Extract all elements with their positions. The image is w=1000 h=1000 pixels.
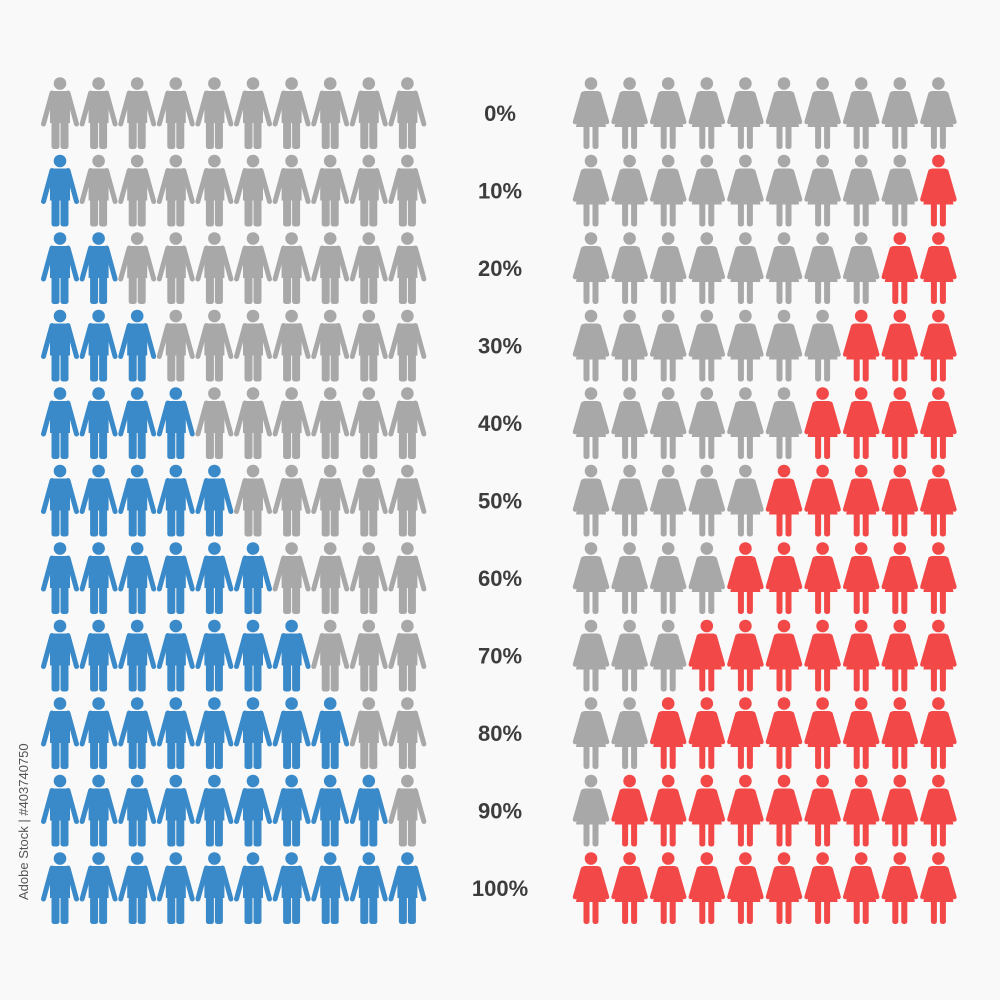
row 40% men (44, 387, 424, 459)
row 50% women (575, 465, 954, 536)
percentage labels: 30% (478, 334, 522, 358)
row 10% men (44, 155, 424, 226)
row 0% men (44, 77, 424, 149)
row 80% men (44, 697, 424, 769)
percentage labels: 50% (478, 488, 522, 514)
row 30% women (575, 310, 954, 382)
percentage labels: 70% (478, 644, 522, 668)
row 90% women (575, 775, 954, 846)
row 80% women (575, 697, 954, 769)
row 60% men (44, 542, 424, 614)
row 50% men (44, 465, 424, 536)
percentage labels: 80% (478, 721, 522, 746)
stock id text: Adobe Stock | #403740750 (16, 743, 31, 900)
percentage labels: 100% (472, 876, 528, 901)
row 30% men (44, 310, 424, 382)
row 70% men (44, 620, 424, 692)
row 70% women (575, 620, 954, 692)
percentage labels: 10% (478, 178, 522, 204)
panel: men grid (44, 77, 424, 924)
row 10% women (575, 155, 954, 226)
panel: women grid (575, 77, 954, 924)
row 40% women (575, 387, 954, 459)
row 90% men (44, 775, 424, 846)
row 0% women (575, 77, 954, 149)
percentage labels: 60% (478, 566, 522, 591)
percentage labels: 90% (478, 798, 522, 824)
row 100% women (575, 852, 954, 924)
row 100% men (44, 852, 424, 924)
percentage labels: 40% (478, 411, 522, 436)
percentage labels (472, 101, 528, 901)
row 20% men (44, 232, 424, 304)
percentage labels: 20% (478, 256, 522, 281)
percentage labels: 0% (484, 101, 516, 126)
row 60% women (575, 542, 954, 614)
row 20% women (575, 232, 954, 304)
